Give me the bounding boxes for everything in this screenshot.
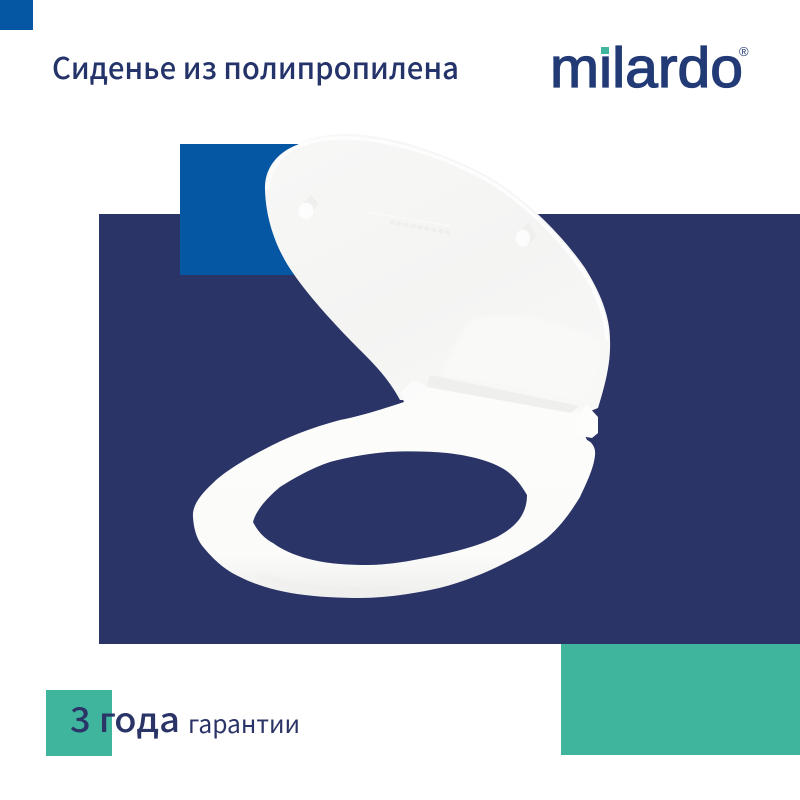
seat shading [256,574,400,589]
logo: milardo: milardo [550,36,743,100]
lid bumper left [298,195,318,220]
corner accent square [0,0,33,30]
navy background panel [99,214,800,644]
hinge right [573,405,598,438]
lid shading [440,316,600,400]
seat ring [193,386,595,598]
hinge bar [427,375,579,413]
lid rim [267,138,607,340]
teal accent block [561,644,800,755]
lid [265,134,610,416]
title: Сиденье из полипропилена [52,44,459,88]
logo: milardo: ® [739,44,749,59]
product: toilet seat with open lid [193,134,610,598]
embossed mark [365,212,452,233]
hinge left [400,380,427,403]
lid bumper right [516,222,536,246]
blue accent square [180,144,305,275]
warranty label: гарантии [188,705,300,741]
warranty teal square [46,690,112,756]
warranty text: 3 года [70,693,180,742]
